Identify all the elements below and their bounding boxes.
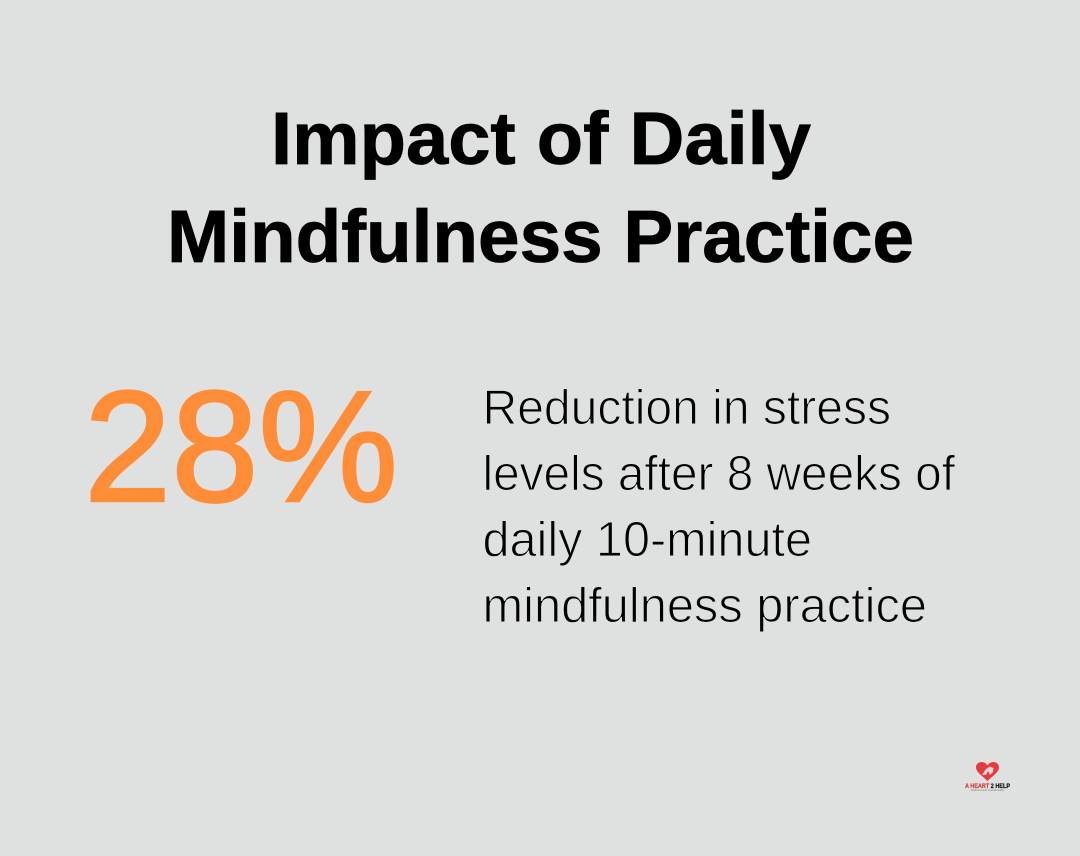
description text (482, 381, 955, 633)
big statistic: 28%: 28% (84, 359, 398, 535)
description text: levels after 8 weeks of (482, 447, 955, 501)
icon: hands in heart (982, 766, 994, 775)
title: Impact of Daily (271, 97, 811, 180)
logo wordmark: A HEART 2 HELP (965, 783, 1010, 790)
description text: daily 10-minute (482, 513, 812, 567)
title (167, 97, 914, 278)
description text: Reduction in stress (482, 381, 891, 435)
icon: heart (976, 762, 999, 781)
description text: mindfulness practice (482, 579, 927, 633)
logo tagline: Wellness and mental health (971, 788, 1004, 792)
logo: A Heart 2 Help (965, 762, 1010, 792)
title: Mindfulness Practice (167, 195, 914, 278)
